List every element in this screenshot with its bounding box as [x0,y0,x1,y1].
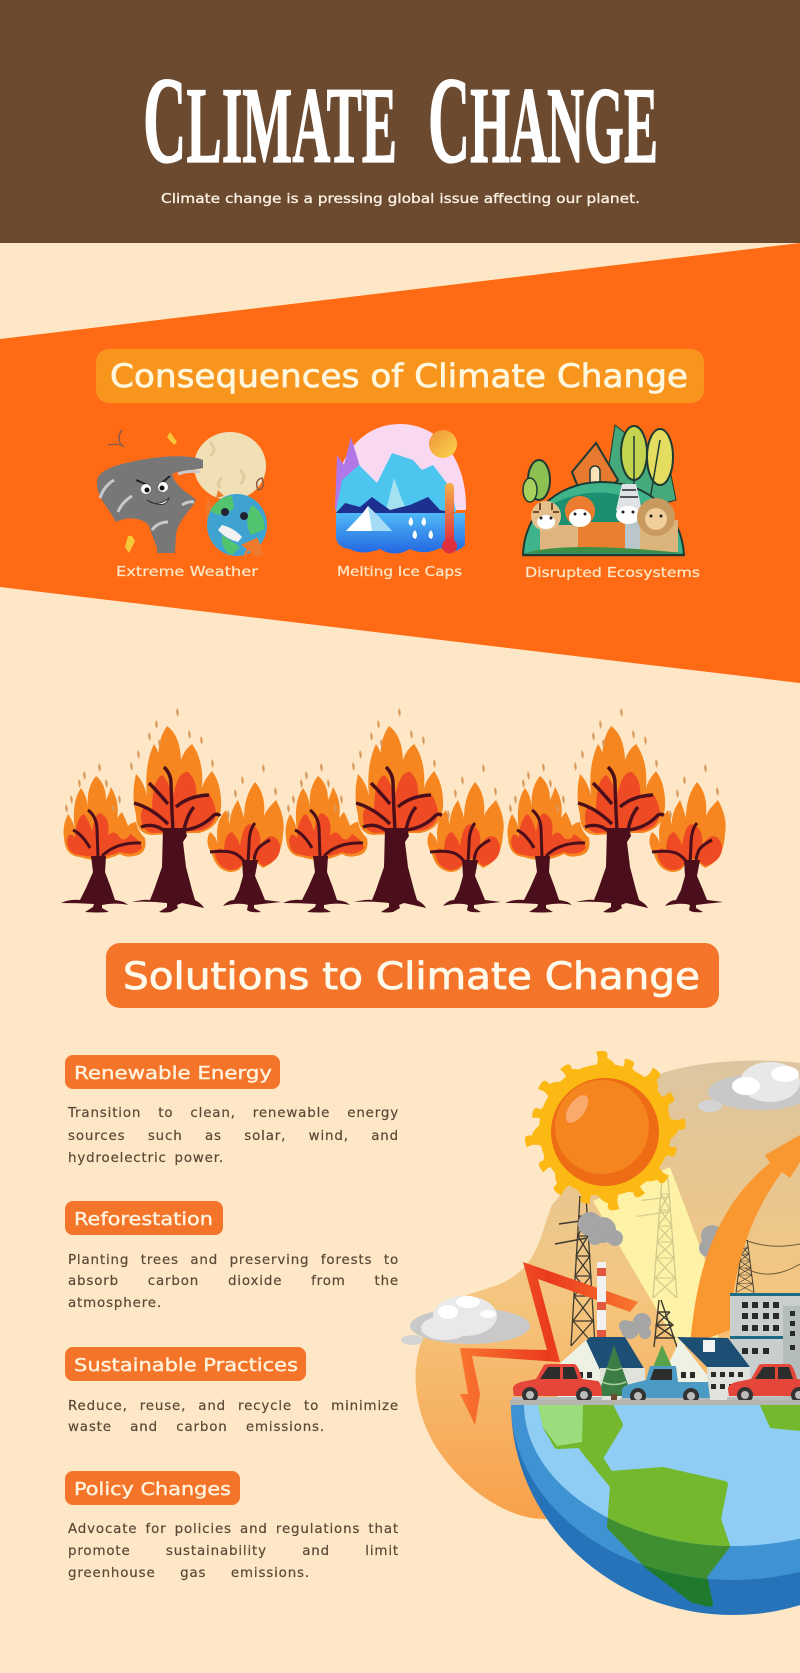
consequences heading pill [96,349,704,403]
car: blue pickup [620,1366,710,1404]
title: CLIMATE [143,52,397,189]
text: reforestation description: absorb carbon dioxide from the [68,1274,399,1289]
text: renewable energy description [68,1106,399,1166]
subtitle: Climate change is a pressing global issue affecting our planet. [161,192,640,207]
light beam [593,1167,720,1346]
text: renewable energy description: Transition to clean, renewable energy [68,1106,399,1121]
text: policy changes description: Advocate for policies and regulations that [68,1522,399,1537]
text: sustainable practices description [68,1399,399,1435]
heading: renewable energy [65,1055,280,1089]
heading: renewable energy: Renewable Energy [74,1063,272,1084]
smoke behind arrow [699,1225,730,1257]
label: disrupted ecosystems: Disrupted Ecosystems [525,565,700,581]
heading: policy changes [65,1471,240,1505]
car: red right [727,1364,800,1403]
text: policy changes description: greenhouse gas emissions. [68,1566,310,1581]
faint beam tower [637,1178,677,1298]
car: red left [512,1364,602,1403]
globe [511,1405,800,1615]
sun [523,1051,686,1211]
header band [0,0,800,243]
heading: reforestation [65,1201,223,1235]
text: renewable energy description: hydroelectric power. [68,1151,224,1166]
label: melting ice caps: Melting Ice Caps [337,564,462,580]
text: sustainable practices description: Reduce, reuse, and recycle to minimize [68,1399,399,1414]
icon: extreme weather [97,430,267,557]
factory building right [730,1293,800,1401]
warm atmosphere blob [416,1061,800,1530]
illustration: earth, sun and factories [401,1051,800,1624]
label: extreme weather: Extreme Weather [116,564,259,580]
heading: sustainable practices: Sustainable Practices [74,1355,298,1376]
icon: melting ice caps [335,424,466,554]
consequences heading pill: Consequences of Climate Change [110,357,688,395]
solutions heading pill: Solutions to Climate Change [123,955,700,998]
cloud top right [698,1062,800,1112]
pine trees [598,1345,678,1402]
factory house left [557,1337,645,1404]
text: reforestation description [68,1253,399,1311]
zigzag red arrow [460,1262,638,1425]
text: policy changes description: promote sustainability and limit [68,1544,399,1559]
cloud left [401,1296,530,1345]
chimney [597,1262,606,1354]
solutions heading pill [106,943,719,1008]
text: sustainable practices description: waste and carbon emissions. [68,1420,325,1435]
heading: policy changes: Policy Changes [74,1479,231,1500]
text: reforestation description: atmosphere. [68,1296,162,1311]
smoke clouds [578,1212,651,1339]
heading: sustainable practices [65,1347,306,1381]
text: renewable energy description: sources such as solar, wind, and [68,1129,399,1144]
tower left [555,1196,595,1346]
orange consequences panel [0,243,800,683]
dark lower tower centre [654,1300,677,1347]
illustration: row of burning trees [61,708,726,912]
text: reforestation description: Planting trees and preserving forests to [68,1253,399,1268]
road strip [510,1400,800,1405]
wires and right tower [724,1240,800,1292]
icon: disrupted ecosystems [523,425,684,555]
factory house centre [667,1337,750,1402]
text: policy changes description [68,1522,399,1581]
upward orange arrow [690,1135,800,1345]
heading: reforestation: Reforestation [74,1209,213,1230]
